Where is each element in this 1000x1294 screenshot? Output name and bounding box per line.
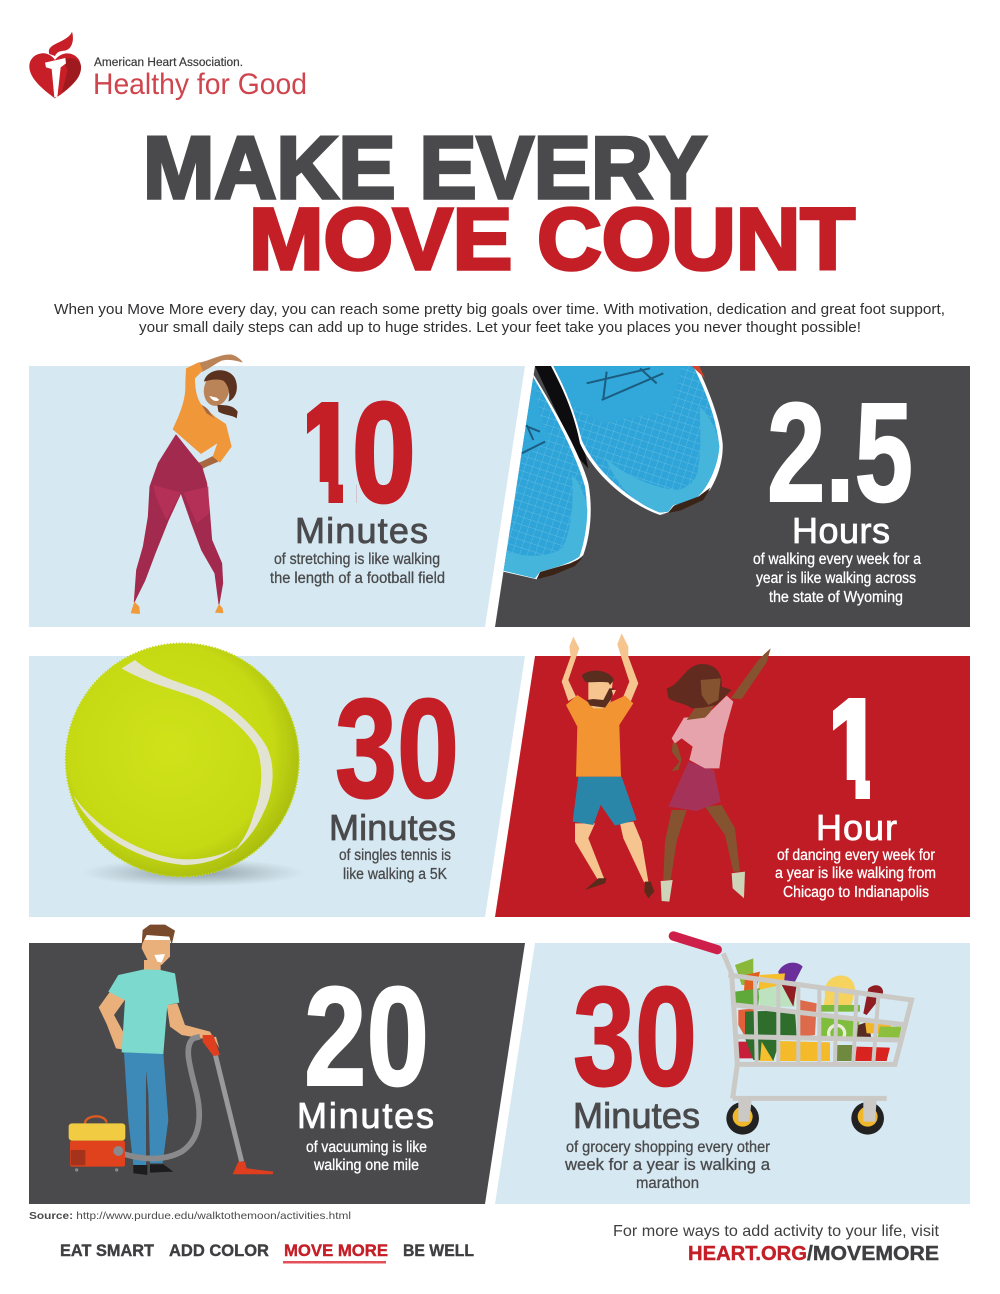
- panel background: [29, 656, 525, 917]
- number: 20: 20: [304, 957, 429, 1115]
- caption: [306, 1139, 427, 1174]
- panel background: [495, 943, 970, 1204]
- unit: hours: Hours: [792, 510, 890, 551]
- woman: [661, 648, 771, 902]
- panel background: [29, 943, 525, 1204]
- caption: the length of a football field: [270, 570, 445, 587]
- caption: [775, 847, 936, 901]
- man: [562, 633, 654, 898]
- illustration: tennis ball: [66, 643, 305, 887]
- panel background: [495, 366, 970, 627]
- panel background: [495, 656, 970, 917]
- footer navigation: MOVE MORE: [284, 1241, 388, 1260]
- footer navigation: [60, 1241, 474, 1264]
- caption: marathon: [636, 1175, 699, 1192]
- number: 10: 10: [295, 374, 415, 532]
- caption: Chicago to Indianapolis: [783, 884, 929, 901]
- number: 1: 1: [822, 670, 885, 828]
- logo: American Heart Association Healthy for Good: [29, 32, 307, 101]
- footer navigation: BE WELL: [403, 1241, 474, 1260]
- panel: 30 minutes tennis: [29, 643, 525, 917]
- caption: year is like walking across: [756, 570, 916, 587]
- illustration: dancing couple: [562, 633, 771, 902]
- source note: Source: http://www.purdue.edu/walktothemoon/activities.html: [29, 1210, 351, 1222]
- illustration: stretching woman: [131, 355, 243, 614]
- caption: [339, 847, 451, 883]
- intro paragraph: [54, 301, 945, 336]
- icon: heart and torch: [29, 32, 81, 98]
- unit: minutes: Minutes: [297, 1095, 434, 1136]
- unit: minutes: Minutes: [573, 1095, 700, 1136]
- caption: like walking a 5K: [343, 866, 448, 883]
- call to action: For more ways to add activity to your life, visit: [613, 1223, 940, 1240]
- title line: make every: MAKE EVERY: [143, 118, 707, 217]
- caption: of singles tennis is: [339, 847, 451, 864]
- panel: 2.5 hours walking: [495, 366, 970, 627]
- caption: of dancing every week for: [777, 847, 935, 864]
- caption: of grocery shopping every other: [566, 1139, 770, 1156]
- illustration: grocery cart: [673, 936, 912, 1135]
- intro paragraph: your small daily steps can add up to huge strides. Let your feet take you places you never thought possible!: [139, 319, 861, 336]
- title line: move count: MOVE COUNT: [249, 191, 855, 288]
- panel: 30 minutes grocery shopping: [495, 936, 970, 1204]
- caption: [753, 551, 921, 606]
- caption: walking one mile: [313, 1157, 419, 1174]
- logo text: Healthy for Good: Healthy for Good: [93, 68, 307, 101]
- illustration: man vacuuming: [69, 925, 273, 1175]
- caption: of vacuuming is like: [306, 1139, 427, 1156]
- panel background: [29, 366, 525, 627]
- caption: of stretching is like walking: [274, 551, 440, 568]
- call to action: [613, 1223, 940, 1265]
- footer navigation: ADD COLOR: [169, 1241, 269, 1260]
- call to action: /MOVEMORE: [807, 1242, 939, 1265]
- intro paragraph: When you Move More every day, you can reach some pretty big goals over time. With motivation, dedication and great foot support,: [54, 301, 945, 318]
- caption: [564, 1139, 771, 1192]
- unit: hour: Hour: [816, 807, 897, 848]
- panel: 1 hour dancing: [495, 633, 970, 917]
- caption: [270, 551, 445, 587]
- panel: 10 minutes stretching: [29, 355, 525, 627]
- unit: minutes: Minutes: [329, 807, 456, 848]
- number: 2.5: 2.5: [767, 373, 913, 531]
- caption: of walking every week for a: [753, 551, 921, 568]
- number: 30: 30: [573, 957, 697, 1115]
- panel: 20 minutes vacuuming: [29, 925, 525, 1204]
- footer navigation: EAT SMART: [60, 1241, 155, 1260]
- call to action: HEART.ORG: [688, 1242, 807, 1265]
- caption: week for a year is walking a: [564, 1156, 771, 1174]
- caption: a year is like walking from: [775, 865, 936, 882]
- unit: minutes: Minutes: [295, 510, 428, 551]
- number: 30: 30: [335, 669, 459, 827]
- illustration: blue sneakers: [495, 366, 723, 579]
- title: [143, 118, 855, 288]
- caption: the state of Wyoming: [769, 589, 903, 606]
- logo text: American Heart Association: American Heart Association.: [94, 57, 243, 69]
